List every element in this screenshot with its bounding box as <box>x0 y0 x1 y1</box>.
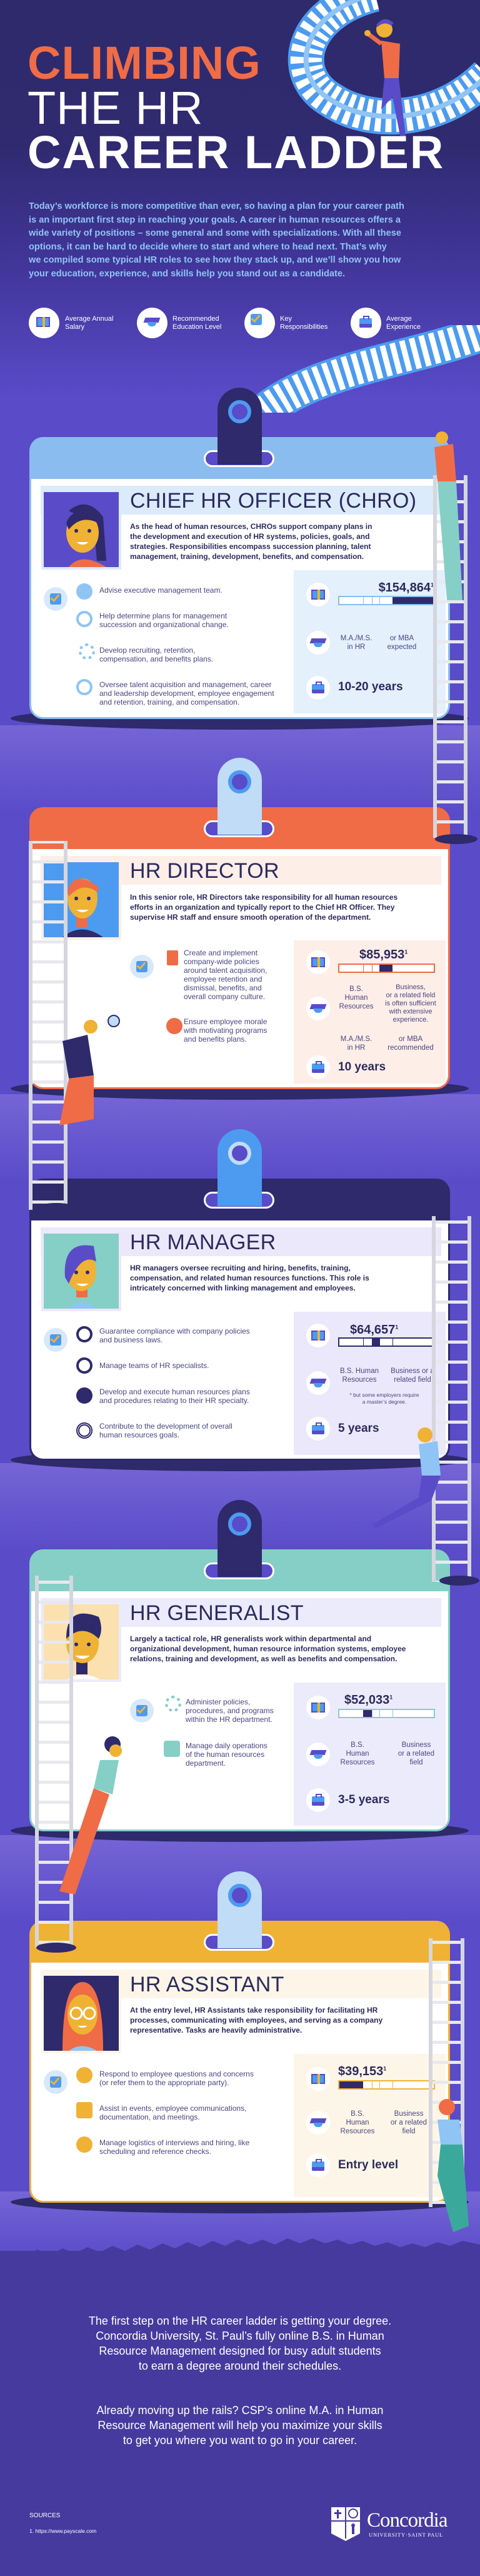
responsibilities <box>44 2067 254 2156</box>
illustration: top spiral staircase <box>288 0 480 135</box>
responsibilities: and benefits plans. <box>184 1035 247 1044</box>
responsibilities: Manage teams of HR specialists. <box>99 1361 209 1370</box>
stats panel <box>294 570 446 713</box>
legend item: education: Education Level <box>172 323 221 331</box>
badge tab <box>218 1129 262 1206</box>
panel: hr generalist: Business <box>402 1741 431 1749</box>
badge tab <box>218 1500 262 1577</box>
responsibilities: and business laws. <box>99 1336 162 1344</box>
panel: chief hr officer: M.A./M.S. <box>341 635 372 642</box>
salary bar <box>338 596 435 605</box>
panel: hr director: Resources <box>339 1003 373 1010</box>
responsibilities: and leadership development, employee engagement <box>99 689 274 698</box>
climber: assistant woman <box>438 2099 469 2232</box>
photo: generalist <box>41 1602 121 1682</box>
responsibilities: employee retention and <box>184 975 262 984</box>
panel: hr director <box>11 758 469 1100</box>
climber: generalist woman <box>59 1736 122 1894</box>
closing text 2: Already moving up the rails? CSP’s online M.A. in Human <box>97 2404 383 2417</box>
responsibilities: overall company culture. <box>184 992 265 1001</box>
panel: hr manager: a master’s degree. <box>362 1399 406 1405</box>
legend item: experience: Average <box>386 315 412 323</box>
description: the development and execution of HR systems, policies, goals, and <box>130 532 369 541</box>
closing text: to earn a degree around their schedules. <box>139 2360 341 2372</box>
responsibilities: (or refer them to the appropriate party). <box>99 2078 229 2087</box>
description: relations, training and development, as well as benefits and compensation. <box>130 1654 397 1663</box>
badge tab <box>218 1871 262 1948</box>
panel: hr director: $85,9531 <box>359 948 408 962</box>
icon: badge <box>76 1326 92 1342</box>
panel: chief hr officer: expected <box>388 643 416 651</box>
panel: hr generalist: $52,0331 <box>344 1693 392 1707</box>
description: efforts in an organization and typically report to the Chief HR Officer. They <box>130 903 394 912</box>
heading: HR GENERALIST <box>130 1601 304 1625</box>
description <box>130 1264 369 1292</box>
photo: assistant <box>41 1973 121 2053</box>
responsibilities: scheduling and reference checks. <box>99 2147 211 2156</box>
description: As the head of human resources, CHROs support company plans in <box>130 522 372 531</box>
heading: HR DIRECTOR <box>130 859 279 883</box>
legend item: experience: Experience <box>386 323 421 331</box>
panel: hr manager: 5 years <box>338 1422 379 1435</box>
title: THE HR <box>28 82 203 134</box>
description: representative. Tasks are heavily administrative. <box>130 2026 302 2035</box>
background: glow bands <box>0 725 480 813</box>
panel: hr generalist: B.S. <box>351 1741 364 1749</box>
responsibilities <box>44 583 274 707</box>
closing text: The first step on the HR career ladder is getting your degree. <box>89 2315 391 2327</box>
icon: gears <box>165 1696 181 1712</box>
responsibilities: with motivating programs <box>184 1026 267 1035</box>
description <box>130 522 372 561</box>
panel: hr manager: $64,6571 <box>350 1323 398 1337</box>
legend item: responsibilities: Key <box>280 315 292 323</box>
climber: director man <box>59 1015 119 1125</box>
panel: hr manager: * but some employers require <box>349 1392 419 1398</box>
salary bar <box>338 1337 435 1347</box>
intro paragraph: is an important first step in reaching your goals. A career in human resources offers a <box>29 215 401 225</box>
responsibilities: around talent acquisition, <box>184 966 267 975</box>
intro paragraph: your education, experience, and skills help you stand out as a candidate. <box>29 269 345 279</box>
logo: Concordia: Concordia <box>367 2509 447 2532</box>
ladder: manager right <box>432 1216 479 1586</box>
legend item: salary: Average Annual <box>65 315 113 323</box>
responsibilities: within the HR department. <box>186 1715 272 1724</box>
panel: chief hr officer: 10-20 years <box>338 680 403 693</box>
responsibilities: Develop recruiting, retention, <box>99 646 195 655</box>
heading: CHIEF HR OFFICER (CHRO) <box>130 489 416 513</box>
responsibilities: compensation, and benefits plans. <box>99 655 213 663</box>
closing text: Resource Management designed for busy adult students <box>99 2345 381 2357</box>
heading: HR ASSISTANT <box>130 1973 284 1996</box>
intro paragraph: Today’s workforce is more competitive than ever, so having a plan for your career path <box>29 201 404 211</box>
description: strategies. Responsibilities encompass succession planning, talent <box>130 542 371 551</box>
icon: document <box>167 950 178 965</box>
responsibilities: of the human resources <box>186 1750 264 1759</box>
panel: hr director: or MBA <box>399 1035 422 1043</box>
panel: hr assistant: $39,1531 <box>338 2065 386 2078</box>
panel: hr assistant: field <box>402 2128 416 2135</box>
ladder: assistant right <box>429 1938 464 2207</box>
photo: manager <box>41 1231 121 1311</box>
description: Largely a tactical role, HR generalists work within departmental and <box>130 1634 371 1643</box>
legend item: responsibilities <box>244 308 328 338</box>
salary bar <box>338 963 435 973</box>
panel: hr assistant: Business <box>394 2110 423 2118</box>
closing text 2: Resource Management will help you maximize your skills <box>98 2419 382 2432</box>
responsibilities: Administer policies, <box>186 1698 250 1706</box>
closing text 2 <box>96 2404 383 2447</box>
closing text <box>89 2315 391 2372</box>
responsibilities: Develop and execute human resources plans <box>99 1387 250 1396</box>
panel: hr assistant: or a related <box>391 2119 427 2126</box>
responsibilities: and retention, training, and compensation. <box>99 698 239 707</box>
panel: hr assistant: Resources <box>341 2128 374 2135</box>
responsibilities: department. <box>186 1759 226 1768</box>
responsibilities: and procedures relating to their HR specialty. <box>99 1396 249 1405</box>
panel: hr generalist <box>11 1500 469 1842</box>
responsibilities: Guarantee compliance with company policies <box>99 1327 250 1336</box>
panel: chief hr officer: in HR <box>348 643 365 651</box>
responsibilities: Assist in events, employee communications, <box>99 2104 246 2113</box>
panel: hr director: experience. <box>393 1016 428 1024</box>
panel: hr generalist: or a related <box>398 1750 434 1758</box>
description <box>130 893 398 922</box>
panel: hr generalist: field <box>409 1759 423 1766</box>
responsibilities <box>130 948 267 1044</box>
description: organizational development, human resource information systems, employee <box>130 1644 406 1653</box>
description: management, training, development, benefits, and compensation. <box>130 552 364 561</box>
ladder: CHRO right <box>433 475 478 844</box>
description: HR managers oversee recruiting and hiring, benefits, training, <box>130 1264 351 1272</box>
legend <box>29 308 421 338</box>
legend item: salary <box>29 308 113 338</box>
responsibilities: Respond to employee questions and concerns <box>99 2070 254 2078</box>
panel: chief hr officer: or MBA <box>390 635 414 642</box>
title: CLIMBING <box>28 37 261 89</box>
description: intricately concerned with linking management and employees. <box>130 1284 356 1292</box>
description: At the entry level, HR Assistants take responsibility for facilitating HR <box>130 2006 378 2015</box>
panel: hr director: 10 years <box>338 1060 386 1074</box>
intro paragraph: wide variety of positions – some general and some with specializations. With all these <box>29 228 401 238</box>
legend item: salary: Salary <box>65 323 84 331</box>
description <box>130 1634 406 1663</box>
legend item: education <box>137 308 221 338</box>
panel: hr generalist: Human <box>346 1750 369 1758</box>
panel: hr generalist: Resources <box>341 1759 374 1766</box>
panel: hr director: or a related field <box>386 992 435 999</box>
intro paragraph: options, it can be hard to decide where to start and where to head next. That’s why <box>29 241 387 251</box>
badge tab <box>218 758 262 835</box>
responsibilities: Contribute to the development of overall <box>99 1422 232 1431</box>
closing text 2: to get you where you want to go in your career. <box>123 2434 357 2447</box>
responsibilities: company-wide policies <box>184 957 259 966</box>
panel: chief hr officer: $154,8641 <box>379 581 434 595</box>
climber: CHRO woman <box>434 431 462 600</box>
title: CAREER LADDER <box>28 126 444 178</box>
responsibilities: Create and implement <box>184 948 258 957</box>
responsibilities: succession and organizational change. <box>99 620 229 629</box>
responsibilities: Advise executive management team. <box>99 586 222 595</box>
background: footer <box>0 2251 480 2576</box>
sources: SOURCES <box>29 2512 60 2519</box>
panel: hr director: Human <box>344 994 368 1002</box>
legend item: education: Recommended <box>172 315 219 323</box>
climber: manager woman <box>372 1427 441 1529</box>
panel: hr director: M.A./M.S. <box>341 1035 372 1043</box>
icon: head <box>166 1018 182 1034</box>
badge tab <box>218 388 262 465</box>
responsibilities: procedures, and programs <box>186 1706 274 1715</box>
icon: speech <box>76 583 92 600</box>
panel: chief hr officer <box>11 388 469 730</box>
legend item: responsibilities: Responsibilities <box>280 323 328 331</box>
responsibilities: Manage daily operations <box>186 1741 268 1750</box>
responsibilities: Ensure employee morale <box>184 1017 267 1026</box>
intro paragraph <box>29 201 404 279</box>
panel: hr director: Business, <box>396 984 426 991</box>
heading: HR MANAGER <box>130 1230 276 1254</box>
description: In this senior role, HR Directors take responsibility for all human resources <box>130 893 398 902</box>
panel: hr director: with extensive <box>389 1008 432 1015</box>
illustration: climbing man at top <box>364 19 406 142</box>
photo: CHRO <box>41 490 121 570</box>
panel: hr manager: related field <box>394 1376 431 1384</box>
panel: hr assistant <box>11 1871 469 2213</box>
panel: hr generalist: 3-5 years <box>338 1793 389 1806</box>
panel: hr manager: Business or a <box>391 1367 434 1375</box>
panel: hr manager: B.S. Human <box>340 1367 379 1375</box>
salary bar <box>338 2080 435 2090</box>
description: supervise HR staff and ensure smooth operation of the department. <box>130 913 371 922</box>
responsibilities <box>130 1696 274 1768</box>
closing text: Concordia University, St. Paul’s fully online B.S. in Human <box>96 2330 384 2342</box>
responsibilities: documentation, and meetings. <box>99 2113 200 2121</box>
panel: hr director: is often sufficient <box>385 1000 436 1007</box>
background: header gradient <box>0 0 480 400</box>
responsibilities <box>44 1326 250 1439</box>
title <box>28 37 444 178</box>
salary bar <box>338 1709 435 1718</box>
photo: director <box>41 860 121 940</box>
panel: hr director: recommended <box>388 1044 434 1052</box>
responsibilities: dismissal, benefits, and <box>184 984 262 992</box>
panel: hr assistant: Entry level <box>338 2158 398 2171</box>
responsibilities: Help determine plans for management <box>99 611 227 620</box>
intro paragraph: we compiled some typical HR roles to see how they stack up, and we’ll show you how <box>29 255 401 265</box>
ladder: director left <box>29 841 76 1213</box>
panel: hr manager: Resources <box>342 1376 376 1384</box>
legend item: experience <box>351 308 421 338</box>
illustration: lower staircase <box>256 325 480 413</box>
description: compensation, and related human resources functions. This role is <box>130 1274 369 1282</box>
panel: hr assistant: Human <box>346 2119 369 2126</box>
icon: reply bubble <box>76 2067 92 2083</box>
sources <box>29 2512 96 2534</box>
ladder: generalist left <box>35 1576 76 1953</box>
panel: hr director: in HR <box>348 1044 365 1052</box>
logo: Concordia <box>331 2507 448 2541</box>
responsibilities: Manage logistics of interviews and hiring, like <box>99 2138 249 2147</box>
logo: Concordia: UNIVERSITY·SAINT PAUL <box>369 2532 443 2538</box>
panel: hr assistant: B.S. <box>351 2110 364 2118</box>
panel: hr director: B.S. <box>349 985 363 993</box>
sources: 1. https://www.payscale.com <box>29 2528 96 2534</box>
panel: hr manager <box>11 1129 468 1471</box>
description: processes, communicating with employees, and serving as a company <box>130 2016 382 2025</box>
description <box>130 2006 382 2035</box>
responsibilities: human resources goals. <box>99 1431 179 1439</box>
responsibilities: Oversee talent acquisition and management, career <box>99 680 271 689</box>
